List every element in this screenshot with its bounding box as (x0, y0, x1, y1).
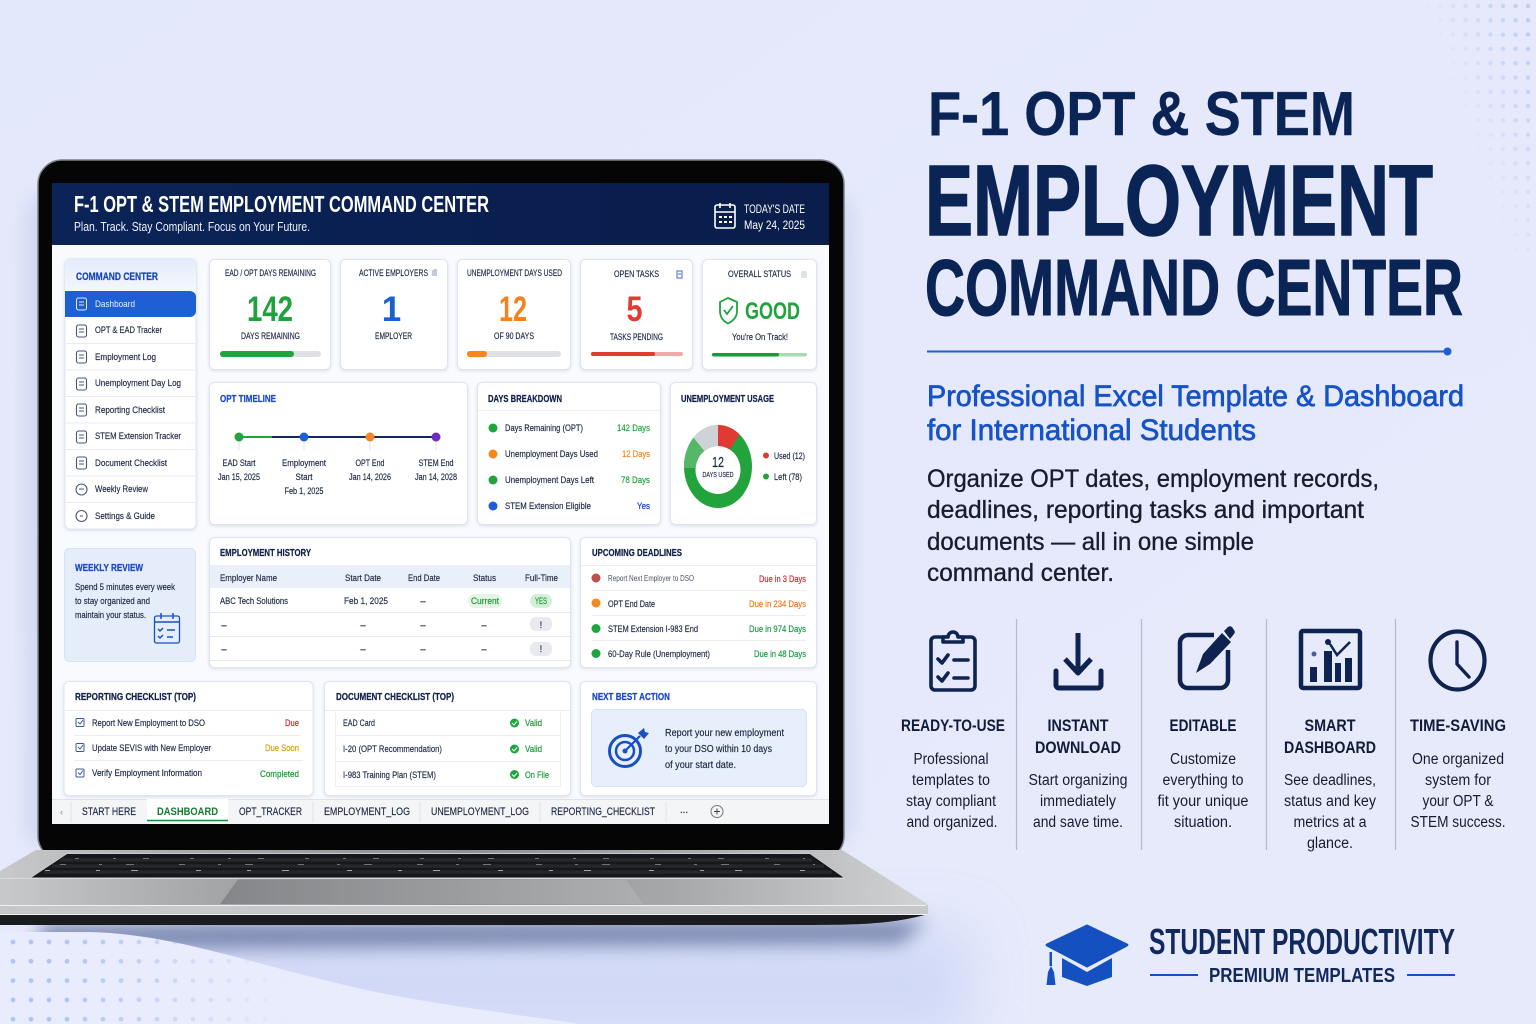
sheet tab bar: UNEMPLOYMENT_LOG (431, 806, 529, 818)
subtitle: for International Students (927, 414, 1256, 447)
panel: document checklist: On File (525, 770, 549, 781)
feature: time-saving: system for (1425, 772, 1491, 789)
panel: upcoming deadlines: STEM Extension I-983 End (608, 624, 698, 635)
description: command center. (927, 559, 1114, 587)
table empty rows: – (420, 620, 426, 631)
panel: document checklist: I-983 Training Plan (STEM) (343, 770, 436, 781)
table empty rows: – (481, 644, 487, 655)
today's date: TODAY'S DATE (744, 204, 805, 216)
panel: KPI open tasks: OPEN TASKS (614, 269, 659, 279)
icon: checklist calendar (154, 613, 180, 643)
feature: instant download (1028, 633, 1128, 831)
feature: instant download: and save time. (1033, 814, 1123, 831)
panel: KPI unemployment days used: 12 (499, 290, 527, 329)
icon: clipboard checklist (931, 632, 975, 690)
timeline labels: OPT End (356, 458, 384, 468)
panel: KPI overall status (702, 260, 816, 370)
panel: OPT timeline: OPT TIMELINE (220, 393, 276, 405)
table row: ABC Tech: Current (471, 596, 499, 607)
panel: upcoming deadlines: Due in 3 Days (759, 574, 806, 585)
table empty rows: – (360, 620, 366, 631)
sidebar menu items: STEM Extension Tracker (95, 431, 181, 442)
panel: days breakdown: 12 Days (622, 449, 650, 460)
laptop (0, 160, 928, 925)
panel: reporting checklist: Verify Employment Information (92, 768, 202, 779)
panel: KPI overall status: You're On Track! (732, 332, 788, 342)
logo: wordmark (1149, 921, 1455, 987)
panel: KPI open tasks (580, 260, 692, 370)
sheet tab bar (52, 799, 829, 824)
active item: dashboard: Dashboard (95, 299, 135, 310)
table empty rows: – (420, 644, 426, 655)
table row: ABC Tech: YES (535, 596, 547, 607)
panel: weekly review: to stay organized and (75, 596, 150, 607)
panel: reporting checklist (64, 682, 313, 796)
panel: days breakdown: Yes (637, 501, 650, 512)
table header (210, 565, 570, 588)
panel: upcoming deadlines: Due in 48 Days (754, 649, 806, 660)
sheet tab bar: ‹ (60, 807, 63, 817)
description (927, 465, 1379, 587)
sheet tab bar: EMPLOYMENT_LOG (324, 806, 410, 818)
sidebar menu items (66, 325, 195, 522)
dashboard title: F-1 OPT & STEM EMPLOYMENT COMMAND CENTER (74, 191, 489, 217)
panel: days breakdown: DAYS BREAKDOWN (488, 393, 562, 405)
panel: reporting checklist: REPORTING CHECKLIST (TOP) (75, 691, 196, 703)
panel: KPI open tasks: 5 (626, 290, 642, 329)
table empty rows: – (481, 620, 487, 631)
panel: next best action: to your DSO within 10 days (665, 744, 772, 755)
panel: next best action (580, 682, 816, 796)
dashboard subtitle: Plan. Track. Stay Compliant. Focus on Your Future. (74, 220, 310, 234)
table header: Full-Time (525, 573, 558, 584)
logo: wordmark: PREMIUM TEMPLATES (1209, 965, 1395, 987)
icon: download arrow (1056, 633, 1101, 688)
description: deadlines, reporting tasks and important (927, 496, 1364, 524)
laptop lid (38, 160, 844, 860)
panel: days breakdown: 142 Days (617, 423, 650, 434)
description: Organize OPT dates, employment records, (927, 465, 1379, 493)
table row: ABC Tech: – (420, 596, 426, 607)
panel: days breakdown: 78 Days (621, 475, 650, 486)
feature: instant download: immediately (1040, 793, 1116, 810)
panel: upcoming deadlines: Due in 234 Days (749, 599, 806, 610)
panel: KPI active employers: ACTIVE EMPLOYERS (359, 268, 428, 278)
feature: smart dashboard: See deadlines, (1284, 772, 1376, 789)
panel: reporting checklist: Report New Employment to DSO (92, 718, 205, 729)
panel: reporting checklist: Completed (260, 769, 299, 780)
panel: days breakdown: Unemployment Days Left (505, 475, 594, 486)
accent rule (927, 348, 1452, 356)
checkboxes (76, 718, 84, 777)
panel: upcoming deadlines: UPCOMING DEADLINES (592, 547, 682, 559)
feature: ready-to-use: Professional (914, 751, 988, 768)
table header: Employer Name (220, 573, 277, 584)
table empty rows: – (221, 620, 227, 631)
panel: unemployment usage: DAYS USED (702, 472, 734, 479)
sheet tab bar: START HERE (82, 806, 136, 818)
panel: KPI unemployment days used (458, 260, 570, 370)
feature: smart dashboard: status and key (1284, 793, 1376, 810)
dashboard header (52, 183, 829, 245)
panel: upcoming deadlines: OPT End Date (608, 599, 655, 610)
panel: employment history (210, 538, 570, 668)
panel: KPI active employers: 1 (382, 290, 401, 329)
panel: reporting checklist: Due Soon (265, 743, 299, 754)
sidebar menu items: Reporting Checklist (95, 405, 165, 416)
panel: sidebar command center (65, 259, 196, 529)
panel: unemployment usage (670, 382, 816, 524)
feature: ready-to-use: and organized. (906, 814, 998, 831)
feature: instant download: INSTANT (1048, 717, 1108, 735)
feature: editable: Customize (1170, 751, 1236, 768)
panel: weekly review: maintain your status. (75, 610, 146, 621)
today's date: May 24, 2025 (744, 220, 805, 232)
donut legend: Used (12) (774, 451, 805, 462)
timeline labels: Jan 15, 2025 (218, 472, 260, 482)
feature: editable: situation. (1174, 814, 1232, 831)
subtitle: Professional Excel Template & Dashboard (927, 380, 1464, 413)
timeline labels: Feb 1, 2025 (284, 486, 324, 496)
feature: editable (1158, 626, 1248, 831)
sidebar menu items: Unemployment Day Log (95, 378, 181, 389)
table empty rows (221, 617, 552, 656)
feature: smart dashboard: SMART (1304, 717, 1356, 735)
icon: calendar (715, 203, 735, 228)
sheet tab bar: OPT_TRACKER (239, 806, 302, 818)
panel: upcoming deadlines: 60-Day Rule (Unemployment) (608, 649, 710, 660)
donut chart (684, 425, 752, 508)
timeline labels: Start (296, 472, 313, 482)
panel: days breakdown (478, 382, 660, 524)
panel: KPI active employers (340, 260, 448, 370)
today's date (744, 204, 805, 232)
panel: next best action: of your start date. (665, 760, 736, 771)
panel: document checklist: I-20 (OPT Recommendation) (343, 744, 442, 755)
sidebar menu items: Settings & Guide (95, 511, 155, 522)
active item: dashboard (65, 291, 196, 317)
panel: document checklist: Valid (525, 744, 542, 755)
feature: smart dashboard: DASHBOARD (1284, 739, 1376, 757)
panel: KPI active employers: EMPLOYER (375, 331, 412, 341)
sidebar menu items: Employment Log (95, 352, 156, 363)
icon: shield check (720, 298, 737, 324)
sheet tab bar: ... (680, 804, 688, 816)
panel: next best action: Report your new employment (665, 728, 784, 739)
panel: upcoming deadlines: Report Next Employer to DSO (608, 574, 694, 583)
feature: time-saving: One organized (1412, 751, 1504, 768)
panel: KPI days remaining: EAD / OPT DAYS REMAINING (225, 268, 316, 278)
donut legend (763, 451, 805, 483)
table empty rows: – (221, 644, 227, 655)
timeline labels: Employment (282, 458, 326, 468)
table row: ABC Tech: ABC Tech Solutions (220, 596, 288, 607)
panel: document checklist: EAD Card (343, 718, 375, 729)
panel: reporting checklist: Due (285, 718, 299, 729)
panel: employment history: EMPLOYMENT HISTORY (220, 547, 311, 559)
feature: smart dashboard (1284, 631, 1376, 852)
active tab: dashboard (147, 799, 228, 821)
description: documents — all in one simple (927, 528, 1254, 556)
table header: Start Date (345, 573, 381, 584)
feature: smart dashboard: glance. (1307, 835, 1353, 852)
panel: weekly review (64, 548, 196, 662)
table row: ABC Tech (220, 594, 552, 608)
panel: KPI open tasks: TASKS PENDING (610, 332, 663, 342)
feature: editable: EDITABLE (1170, 717, 1236, 735)
icon: target (610, 728, 649, 766)
active tab: dashboard: DASHBOARD (157, 806, 218, 818)
feature: instant download: DOWNLOAD (1035, 739, 1121, 757)
panel: KPI days remaining (210, 260, 330, 370)
panel: KPI overall status: OVERALL STATUS (728, 269, 791, 279)
sheet tab bar: REPORTING_CHECKLIST (551, 806, 655, 818)
timeline labels: STEM End (418, 458, 454, 468)
feature: smart dashboard: metrics at a (1294, 814, 1367, 831)
panel: KPI unemployment days used: UNEMPLOYMENT DAYS USED (467, 268, 562, 278)
panel: KPI overall status: GOOD (745, 298, 800, 325)
feature: ready-to-use: READY-TO-USE (901, 717, 1005, 735)
table empty rows: ! (540, 644, 542, 655)
table header: End Date (408, 573, 440, 584)
panel: unemployment usage: 12 (712, 454, 724, 471)
feature: ready-to-use: stay compliant (906, 793, 997, 810)
panel: days breakdown: Unemployment Days Used (505, 449, 598, 460)
donut legend: Left (78) (774, 472, 802, 483)
icon: pencil on square (1180, 626, 1235, 688)
panel: days breakdown: Days Remaining (OPT) (505, 423, 583, 434)
feature: time-saving: STEM success. (1410, 814, 1506, 831)
panel: document checklist: DOCUMENT CHECKLIST (TOP) (336, 691, 454, 703)
panel: reporting checklist: Update SEVIS with New Employer (92, 743, 211, 754)
screen (52, 183, 829, 824)
laptop base (0, 850, 928, 925)
feature: instant download: Start organizing (1028, 772, 1128, 789)
table empty rows: ! (540, 620, 542, 631)
panel: upcoming deadlines: Due in 974 Days (749, 624, 806, 635)
subtitle (927, 380, 1464, 447)
feature: time-saving: your OPT & (1422, 793, 1494, 810)
feature: time-saving (1410, 632, 1506, 831)
sidebar menu items: Weekly Review (95, 484, 148, 495)
panel: OPT timeline (210, 382, 468, 524)
timeline labels: Jan 14, 2026 (349, 472, 391, 482)
panel: KPI days remaining: DAYS REMAINING (241, 331, 300, 341)
feature: editable: fit your unique (1158, 793, 1248, 810)
panel: days breakdown: STEM Extension Eligible (505, 501, 591, 512)
table empty rows: – (360, 644, 366, 655)
panel: sidebar command center: COMMAND CENTER (76, 271, 158, 283)
panel: KPI days remaining: 142 (247, 290, 293, 329)
sidebar menu items: OPT & EAD Tracker (95, 325, 162, 336)
panel: unemployment usage: UNEMPLOYMENT USAGE (681, 393, 774, 405)
feature: ready-to-use (901, 632, 1005, 831)
feature: editable: everything to (1162, 772, 1244, 789)
feature: ready-to-use: templates to (912, 772, 990, 789)
panel: document checklist: Valid (525, 718, 542, 729)
timeline labels: Jan 14, 2028 (415, 472, 457, 482)
timeline track (234, 432, 440, 450)
table header: Status (473, 573, 496, 584)
feature: time-saving: TIME-SAVING (1410, 717, 1506, 735)
timeline labels: EAD Start (222, 458, 256, 468)
title block: F-1 OPT & STEM (928, 80, 1355, 149)
timeline labels (218, 458, 457, 496)
panel: weekly review: WEEKLY REVIEW (75, 562, 143, 574)
panel: weekly review: Spend 5 minutes every week (75, 582, 175, 593)
panel: KPI unemployment days used: OF 90 DAYS (494, 331, 534, 341)
icon: chart board (1301, 631, 1360, 688)
logo: graduation cap (1046, 925, 1128, 986)
sidebar menu items: Document Checklist (95, 458, 167, 469)
icon: clock (1430, 632, 1484, 690)
title block (925, 80, 1463, 332)
panel: document checklist (324, 682, 570, 796)
panel: upcoming deadlines (580, 538, 816, 668)
table row: ABC Tech: Feb 1, 2025 (344, 596, 388, 607)
panel: next best action: NEXT BEST ACTION (592, 691, 670, 703)
